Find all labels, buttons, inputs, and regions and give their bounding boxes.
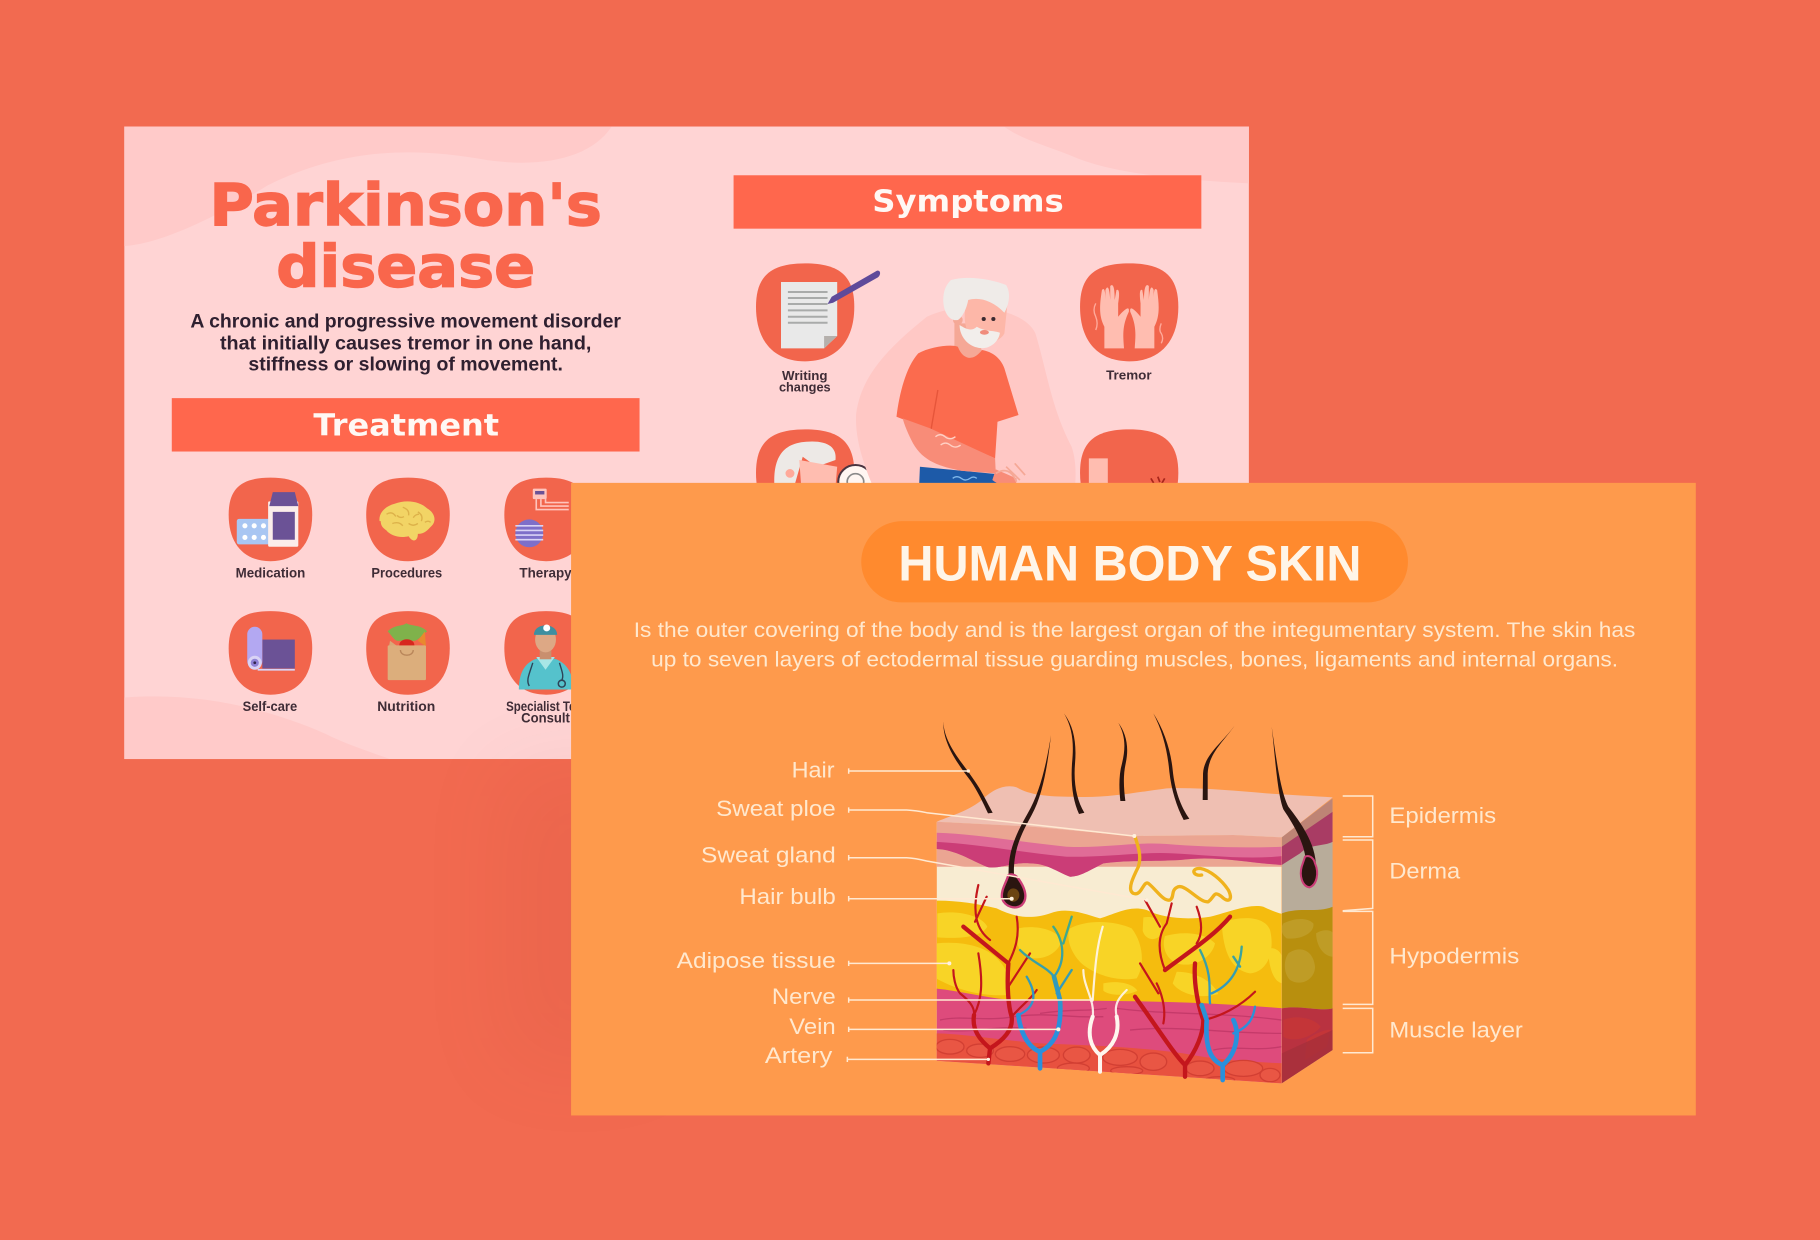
diagram: skin cross-section [847,713,1373,1090]
panel: Parkinson's disease [124,127,1249,759]
skin block side face [1282,793,1335,1087]
skin block top surface [937,786,1333,837]
icon: Nutrition [366,611,450,695]
labels: right layer labels: Epidermis [1389,803,1496,828]
label: Therapy: Therapy [519,564,572,580]
title: Parkinson's disease [214,180,600,288]
icon: Procedures [366,478,450,561]
icon: Therapy [504,478,573,562]
icon: Writing changes [756,263,880,361]
labels: left anatomy labels: Adipose tissue [677,948,836,973]
icon: Rigidity symptom [1080,429,1178,483]
nerve network [1083,927,1127,1072]
icon: Tremor [1080,263,1178,361]
illustration and symptom icons [756,263,1178,527]
label: Specialist Consult: Consult [521,710,570,726]
labels: left anatomy labels: Vein [789,1014,836,1039]
title: Human Body Skin [861,521,1408,602]
hair strands [943,713,1316,877]
text block: definition [190,310,621,375]
label: Writing changes: changes [779,380,831,395]
text block: definition: A chronic and progressive movement disorder [190,310,621,332]
icon: Vision symptom [756,429,872,483]
sweat gland [1131,837,1230,902]
labels: right layer labels [1389,803,1523,1043]
labels: left anatomy labels: Artery [765,1043,833,1068]
title: Parkinson's disease: disease [276,233,535,301]
label: Writing changes [780,370,830,394]
icon: Specialist [504,611,572,695]
labels: left anatomy labels [677,758,836,1068]
heading: Symptoms [734,175,1201,229]
heading: Treatment: Treatment [313,408,499,443]
layer brackets [1343,796,1373,1053]
label: Writing changes: Writing [782,368,828,383]
label: Nutrition: Nutrition [377,698,435,714]
text block: skin description: up to seven layers of ectodermal tissue guarding muscles, bones, ligaments and internal organs. [651,647,1618,671]
label: Self-care: Self-care [243,698,297,714]
title: Human Body Skin: HUMAN BODY SKIN [898,535,1362,591]
icon: Medication [229,478,312,561]
label: Specialist Consult [506,701,572,722]
label: Tremor: Tremor [1106,368,1152,382]
labels: right layer labels: Muscle layer [1389,1018,1523,1043]
vein network [1018,917,1255,1080]
labels: left anatomy labels: Nerve [772,984,836,1009]
text block: skin description [634,618,1635,671]
text block: definition: stiffness or slowing of movement. [248,353,563,375]
text block: definition: that initially causes tremor in one hand, [220,332,591,354]
labels: left anatomy labels: Hair [792,758,835,783]
labels: right layer labels: Derma [1389,859,1461,884]
labels: right layer labels: Hypodermis [1389,943,1519,968]
hair bulbs [1002,856,1317,907]
artery network [953,885,1255,1077]
heading: Treatment [172,398,640,452]
label: Medication: Medication [236,564,305,580]
icon: Self-care [229,611,312,695]
labels: left anatomy labels: Sweat ploe [716,796,836,821]
illustration: older man with tremor [856,278,1076,483]
leader lines [847,768,1148,1062]
label: Specialist Consult: Specialist Tele [506,698,585,714]
heading: Symptoms: Symptoms [872,184,1064,219]
soft shadow beside skin panel [499,766,662,1068]
label: Procedures: Procedures [371,564,442,580]
panel: Human body skin [571,483,1696,1115]
skin block front layers [933,818,1287,1090]
title: Parkinson's disease: Parkinson's [210,171,602,239]
text block: skin description: Is the outer covering of the body and is the largest organ of the integumentary system. The skin has [634,618,1635,642]
labels: left anatomy labels: Sweat gland [701,842,836,867]
labels: left anatomy labels: Hair bulb [739,884,836,909]
